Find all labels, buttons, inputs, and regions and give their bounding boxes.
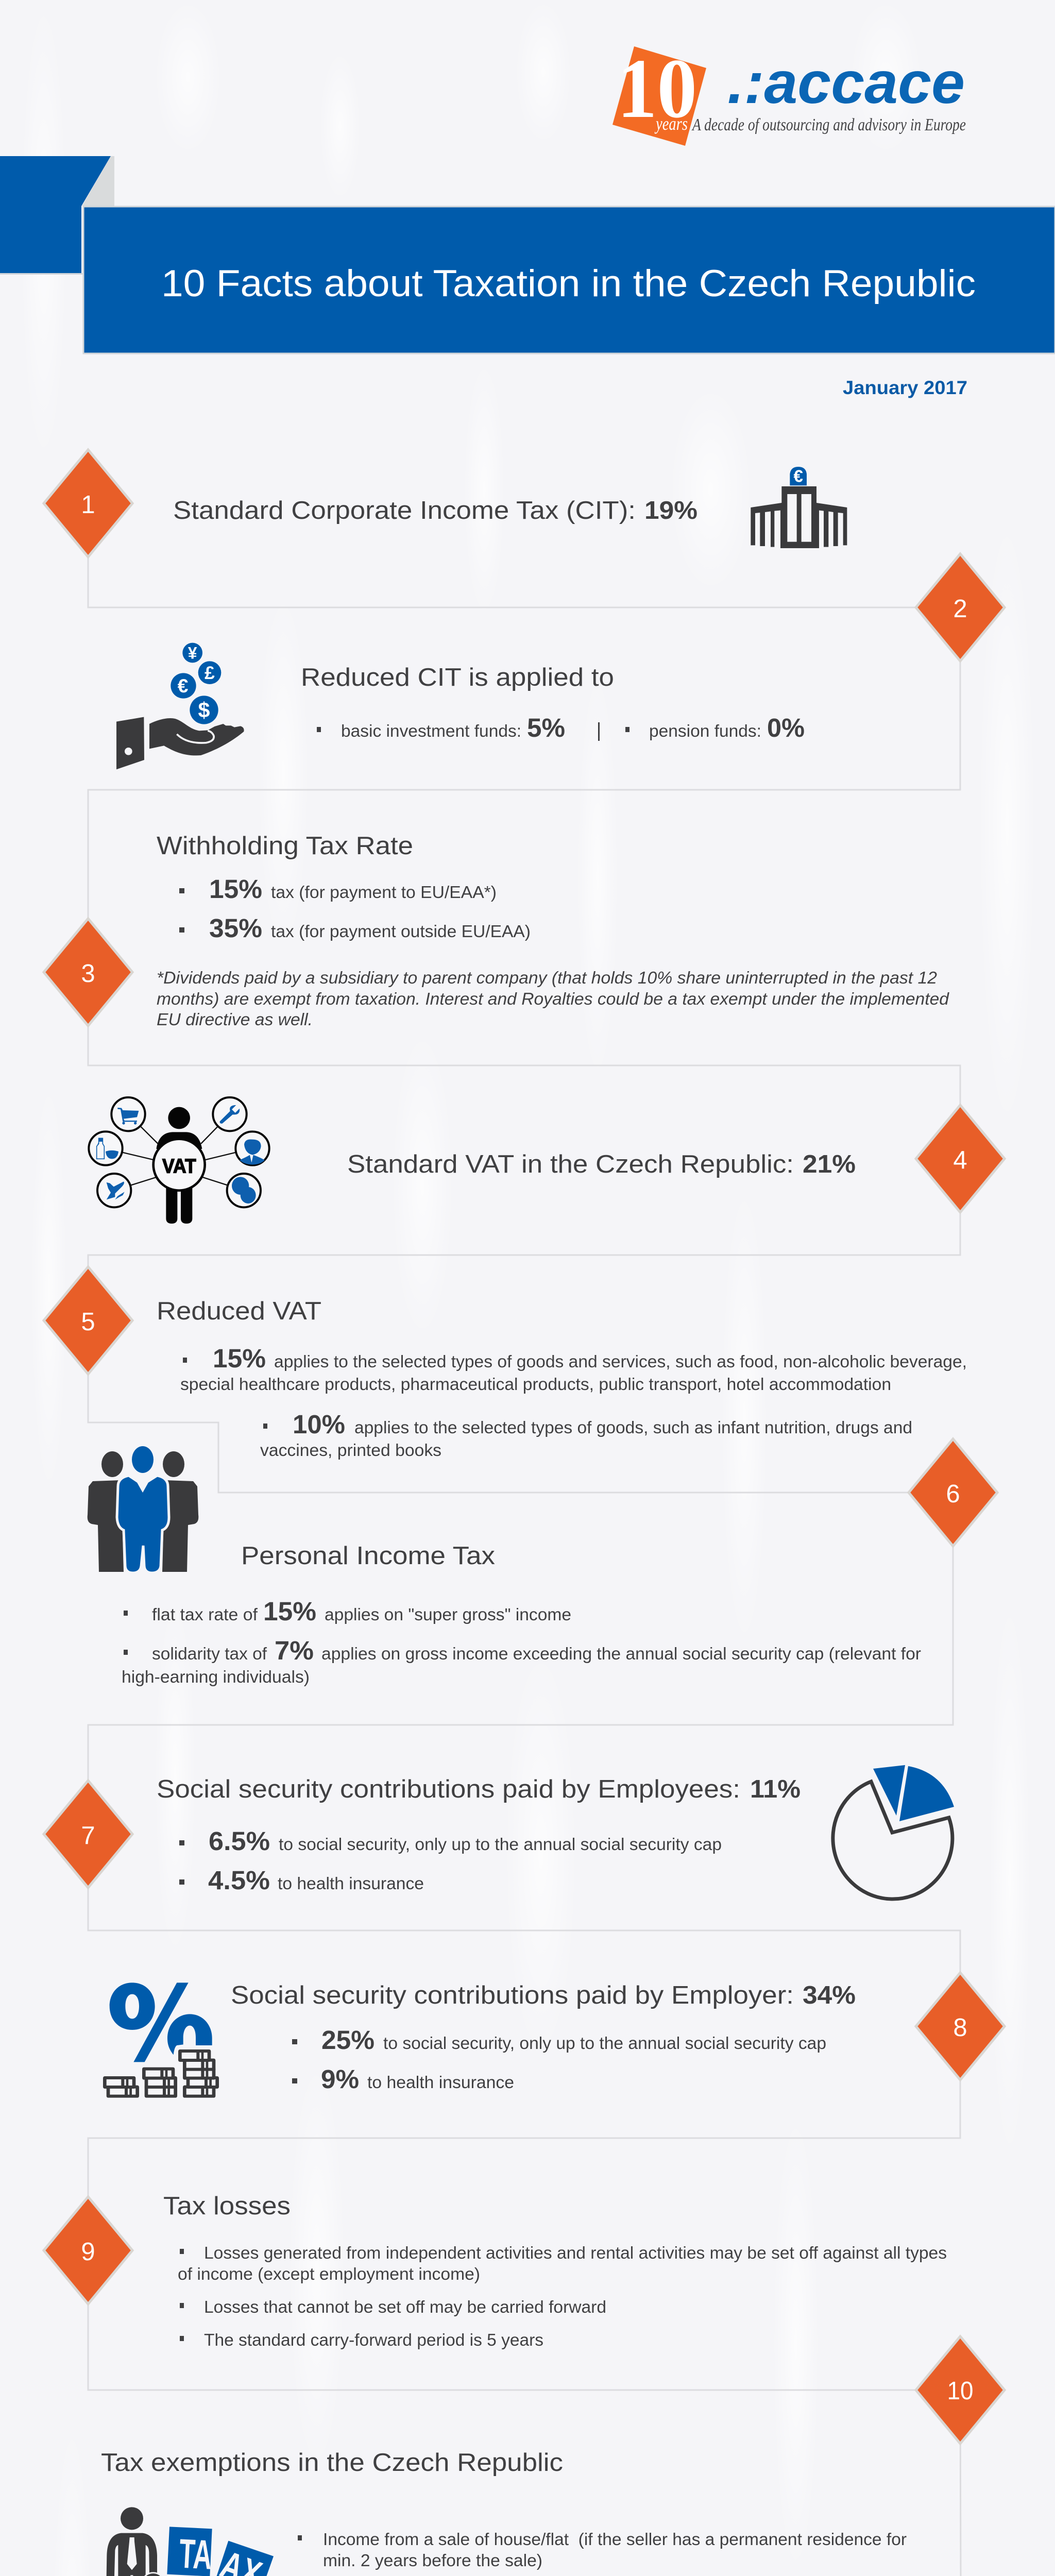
reduced rate 10%: 10% [293, 1410, 345, 1439]
rate 35%: 35% [209, 913, 262, 943]
heading: reduced CIT: Reduced CIT is applied to [301, 664, 614, 691]
icon: VAT person [89, 1097, 269, 1224]
rate 25% [292, 2025, 826, 2055]
badge 10: 10 [947, 2377, 974, 2405]
icon: hand with coins: $ [198, 698, 210, 722]
solidarity tax line: applies on gross income exceeding the annual social security cap (relevant for [321, 1644, 921, 1663]
flat tax line: 15% [263, 1597, 316, 1626]
badge 10 [916, 2336, 1005, 2444]
rate 35% [179, 913, 531, 943]
flat tax line [124, 1597, 571, 1626]
badge 5: 5 [81, 1308, 95, 1336]
rate 25%: to social security, only up to the annual social security cap [383, 2033, 826, 2053]
badge 7 [44, 1781, 132, 1888]
flat tax line: flat tax rate of [152, 1605, 258, 1624]
footnote: *Dividends paid by a subsidiary to parent company (that holds 10% share uninterrupted in the past 12 [157, 968, 937, 987]
badge 6 [909, 1439, 997, 1546]
badge 9: 9 [81, 2238, 95, 2266]
solidarity tax line: solidarity tax of [152, 1644, 267, 1663]
rate 6.5% [179, 1826, 722, 1856]
heading: standard CIT: 19% [644, 497, 697, 524]
icon: bank [751, 467, 847, 548]
heading: standard VAT: Standard VAT in the Czech Republic: [347, 1150, 794, 1178]
rates line: 5% [527, 713, 565, 742]
badge 4 [916, 1105, 1005, 1212]
panel: fact 3 [44, 832, 950, 1029]
rate 15%: 15% [209, 874, 262, 904]
badge 8: 8 [953, 2014, 967, 2042]
heading: withholding tax: Withholding Tax Rate [157, 832, 413, 860]
rate 4.5% [179, 1866, 424, 1895]
icon: VAT person: VAT [162, 1155, 196, 1178]
heading: employee contributions: 11% [750, 1775, 801, 1803]
heading: employer contributions: Social security contributions paid by Employer: [231, 1981, 794, 2009]
rate 15%: tax (for payment to EU/EAA*) [271, 883, 497, 902]
icon: hand with coins: € [178, 675, 189, 697]
bullet: losses set off: of income (except employment income) [178, 2264, 480, 2283]
top logo: years [655, 113, 688, 134]
top logo: 10 [617, 41, 697, 135]
reduced rate 15%: 15% [213, 1344, 266, 1373]
reduced rate 15%: special healthcare products, pharmaceutical products, public transport, hotel accommodation [180, 1375, 891, 1394]
icon: percent and coins [103, 1982, 219, 2098]
bullet: carry-forward period: The standard carry-forward period is 5 years [204, 2330, 543, 2349]
heading: employer contributions: 34% [803, 1981, 856, 2009]
heading: standard CIT: Standard Corporate Income Tax (CIT): [173, 497, 636, 524]
rate 6.5%: 6.5% [209, 1826, 270, 1856]
footnote: EU directive as well. [157, 1010, 313, 1029]
badge 2 [916, 554, 1005, 661]
date: January 2017 [843, 377, 967, 398]
top logo [612, 41, 966, 146]
badge 7: 7 [81, 1822, 95, 1850]
chart: pie icon [833, 1765, 954, 1899]
footnote [157, 968, 950, 1029]
rate 35%: tax (for payment outside EU/EAA) [271, 922, 531, 941]
heading: standard VAT: 21% [803, 1150, 856, 1178]
solidarity tax line [122, 1636, 921, 1686]
reduced rate 15% [180, 1344, 967, 1394]
heading: employee contributions: Social security contributions paid by Employees: [157, 1775, 740, 1803]
top logo: .:accace [727, 50, 965, 116]
rate 9% [292, 2064, 514, 2094]
panel: fact 4 [89, 1097, 1005, 1224]
footnote: months) are exempt from taxation. Interest and Royalties could be a tax exempt under the implemented [157, 989, 950, 1008]
panel: fact 10 [101, 2336, 1005, 2576]
panel: fact 9 [44, 2192, 947, 2349]
panel: fact 5 [44, 1267, 967, 1460]
flat tax line: applies on "super gross" income [325, 1605, 571, 1624]
icon: three people [88, 1446, 198, 1573]
rates line [317, 713, 805, 742]
solidarity tax line: 7% [275, 1636, 314, 1665]
heading: reduced VAT: Reduced VAT [157, 1297, 321, 1325]
rate 4.5%: to health insurance [278, 1874, 424, 1893]
rate 9%: to health insurance [367, 2073, 514, 2092]
badge 4: 4 [953, 1146, 967, 1174]
badge 8 [916, 1973, 1005, 2080]
heading: personal income tax: Personal Income Tax [241, 1542, 495, 1570]
title ribbon [0, 156, 1055, 353]
icon: hand with coins: ¥ [188, 643, 197, 662]
rates line: pension funds: [649, 721, 761, 740]
rates line: basic investment funds: [341, 721, 521, 740]
title ribbon: 10 Facts about Taxation in the Czech Republic [161, 263, 976, 304]
badge 3: 3 [81, 960, 95, 988]
badge 9 [44, 2197, 132, 2304]
rate 4.5%: 4.5% [208, 1866, 270, 1895]
heading: tax exemptions: Tax exemptions in the Czech Republic [101, 2449, 563, 2477]
heading: tax losses: Tax losses [163, 2192, 291, 2220]
bullet: losses set off [178, 2243, 947, 2283]
top logo: A decade of outsourcing and advisory in Europe [691, 115, 966, 134]
reduced rate 10%: applies to the selected types of goods, such as infant nutrition, drugs and [354, 1418, 912, 1437]
icon: man with scissors and TAX [107, 2507, 274, 2576]
rate 9%: 9% [321, 2064, 359, 2094]
badge 5 [44, 1267, 132, 1374]
panel: fact 6 [88, 1439, 997, 1686]
rates line: 0% [767, 713, 805, 742]
reduced rate 10%: vaccines, printed books [260, 1440, 441, 1460]
badge 2: 2 [953, 595, 967, 623]
exemption: house or flat: min. 2 years before the sale) [323, 2551, 542, 2570]
panel: fact 1 [44, 450, 847, 557]
exemption: house or flat: Income from a sale of house/flat (if the seller has a permanent residence for [323, 2530, 907, 2549]
solidarity tax line: high-earning individuals) [122, 1667, 310, 1686]
badge 1: 1 [81, 491, 95, 519]
connector path [88, 449, 962, 2576]
bullet: carried forward: Losses that cannot be set off may be carried forward [204, 2297, 606, 2316]
panel: fact 8 [103, 1973, 1005, 2098]
badge 1 [44, 450, 132, 557]
rate 15% [179, 874, 497, 904]
rate 25%: 25% [321, 2025, 375, 2055]
reduced rate 15%: applies to the selected types of goods and services, such as food, non-alcoholic beverage, [274, 1352, 967, 1371]
exemption: house or flat [298, 2530, 907, 2570]
badge 3 [44, 919, 132, 1026]
panel: fact 7 [44, 1765, 954, 1899]
reduced rate 10% [260, 1410, 912, 1460]
icon: hand with coins: £ [205, 663, 215, 683]
icon: hand with coins [116, 643, 244, 769]
badge 6: 6 [946, 1480, 960, 1508]
rate 6.5%: to social security, only up to the annual social security cap [279, 1835, 722, 1854]
panel: fact 2 [116, 554, 1005, 769]
icon: bank: € [793, 467, 803, 486]
bullet: losses set off: Losses generated from independent activities and rental activities may be set off against all types [204, 2243, 947, 2262]
